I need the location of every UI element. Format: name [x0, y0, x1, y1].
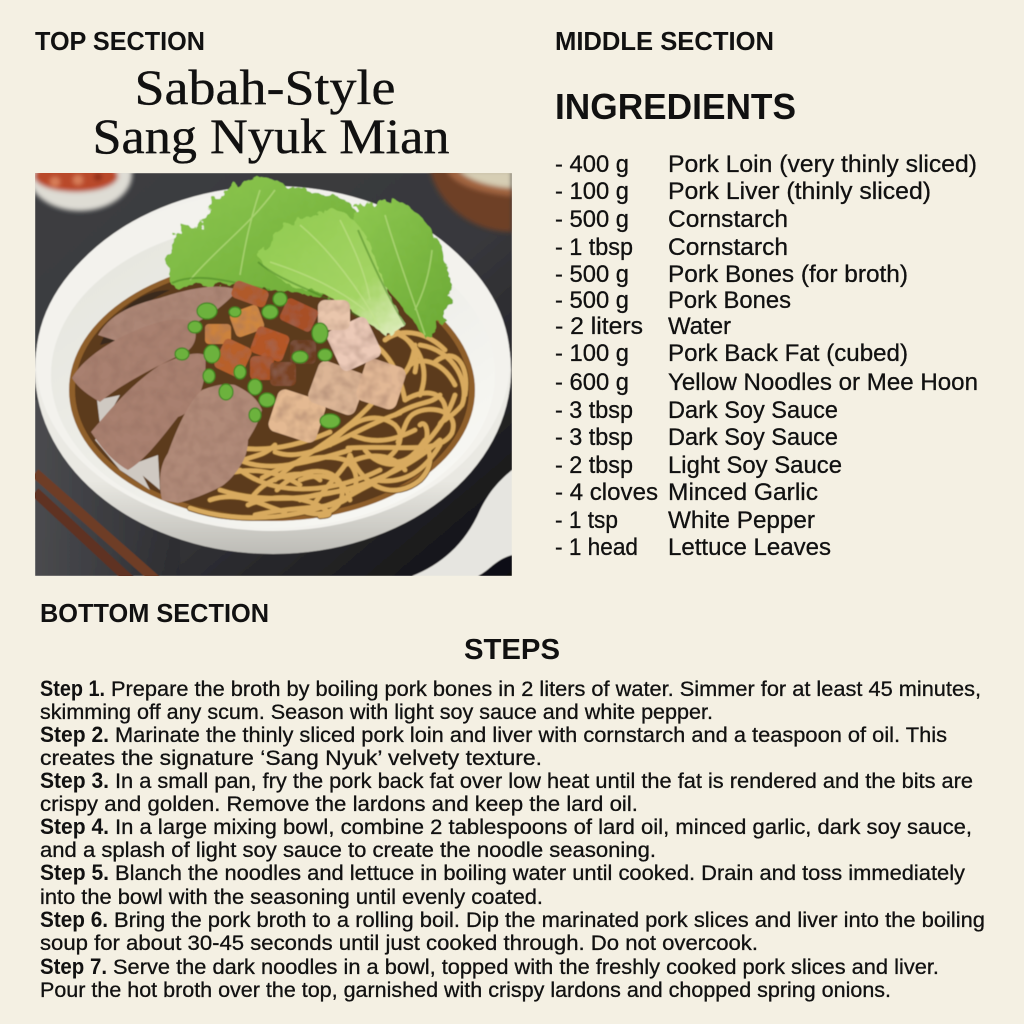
steps text: Step 3. — [40, 768, 109, 793]
pork slices — [72, 287, 262, 503]
title — [92, 59, 450, 164]
steps text: Step 4. — [40, 814, 109, 839]
steps text: soup for about 30-45 seconds until just cooked through. Do not overcook. — [40, 930, 758, 955]
ingredients list: Pork Back Fat (cubed) — [668, 340, 908, 367]
steps text: Step 2. — [40, 722, 109, 747]
ingredients list: - 2 liters — [555, 313, 643, 340]
bowl — [35, 186, 511, 554]
steps text: into the bowl with the seasoning until evenly coated. — [40, 884, 543, 909]
bottom section label: BOTTOM SECTION — [40, 600, 269, 628]
ingredients list: - 3 tbsp — [555, 424, 633, 451]
steps text: Pour the hot broth over the top, garnished with crispy lardons and chopped spring onions. — [40, 977, 891, 1002]
ingredients list: Water — [668, 313, 731, 340]
middle section label: MIDDLE SECTION — [555, 28, 774, 56]
chopsticks — [35, 473, 156, 582]
pale lardons — [266, 300, 408, 445]
steps text: Blanch the noodles and lettuce in boiling water until cooked. Drain and toss immediately — [115, 860, 965, 885]
crispy lardons — [205, 279, 319, 386]
side dish: chili — [35, 173, 136, 214]
ingredients list: - 500 g — [555, 206, 629, 233]
steps text: Prepare the broth by boiling pork bones in 2 liters of water. Simmer for at least 45 minutes, — [111, 676, 981, 701]
steps text: Marinate the thinly sliced pork loin and liver with cornstarch and a teaspoon of oil. This — [115, 722, 947, 747]
steps text: In a large mixing bowl, combine 2 tablespoons of lard oil, minced garlic, dark soy sauce, — [115, 814, 972, 839]
ingredients list: Yellow Noodles or Mee Hoon — [668, 369, 978, 396]
side bowl: brown — [430, 170, 512, 232]
ingredients list: - 600 g — [555, 369, 629, 396]
title: Sang Nyuk Mian — [92, 108, 450, 164]
noodles — [190, 330, 466, 518]
steps text: and a splash of light soy sauce to create the noodle seasoning. — [40, 837, 656, 862]
ingredients list: - 3 tbsp — [555, 397, 633, 424]
steps text: Step 7. — [40, 954, 107, 979]
steps text: crispy and golden. Remove the lardons and keep the lard oil. — [40, 791, 638, 816]
ingredients list: - 100 g — [555, 340, 629, 367]
ingredients list — [555, 151, 978, 561]
ingredients list: - 400 g — [555, 151, 629, 178]
steps text: creates the signature ‘Sang Nyuk’ velvety texture. — [40, 745, 542, 770]
steps text: In a small pan, fry the pork back fat over low heat until the fat is rendered and the bits are — [115, 768, 973, 793]
steps text: Step 1. — [40, 676, 105, 701]
title: Sabah-Style — [134, 59, 396, 115]
steps text: Step 6. — [40, 907, 108, 932]
ingredients list: Light Soy Sauce — [668, 452, 842, 479]
ingredients list: - 100 g — [555, 178, 629, 205]
ingredients list: Pork Loin (very thinly sliced) — [668, 151, 977, 178]
steps heading: STEPS — [464, 634, 560, 666]
steps text: Bring the pork broth to a rolling boil. Dip the marinated pork slices and liver into the boiling — [114, 907, 985, 932]
ingredients list: Lettuce Leaves — [668, 534, 831, 561]
ingredients list: Cornstarch — [668, 234, 788, 261]
ingredients list: - 1 tbsp — [555, 234, 633, 261]
ingredients list: White Pepper — [668, 507, 815, 534]
top section label: TOP SECTION — [35, 28, 205, 56]
ingredients heading: INGREDIENTS — [555, 86, 796, 127]
lettuce — [168, 176, 452, 340]
ingredients list: Pork Bones — [668, 287, 791, 314]
ingredients list: Minced Garlic — [668, 479, 818, 506]
ingredients list: - 2 tbsp — [555, 452, 633, 479]
ingredients list: - 1 tsp — [555, 507, 618, 534]
spoon — [412, 470, 512, 576]
ingredients list: Dark Soy Sauce — [668, 424, 838, 451]
steps text: skimming off any scum. Season with light soy sauce and white pepper. — [40, 699, 713, 724]
ingredients list: Pork Liver (thinly sliced) — [668, 178, 931, 205]
ingredients list: Cornstarch — [668, 206, 788, 233]
ingredients list: Dark Soy Sauce — [668, 397, 838, 424]
spring onions — [175, 292, 340, 428]
photo: bowl of Sang Nyuk Mian — [35, 173, 512, 576]
steps text: Step 5. — [40, 860, 109, 885]
steps text: Serve the dark noodles in a bowl, topped with the freshly cooked pork slices and liver. — [113, 954, 939, 979]
ingredients list: - 500 g — [555, 261, 629, 288]
ingredients list: - 4 cloves — [555, 479, 658, 506]
ingredients list: - 500 g — [555, 287, 629, 314]
steps text — [40, 676, 985, 1002]
ingredients list: - 1 head — [555, 534, 638, 561]
ingredients list: Pork Bones (for broth) — [668, 261, 908, 288]
